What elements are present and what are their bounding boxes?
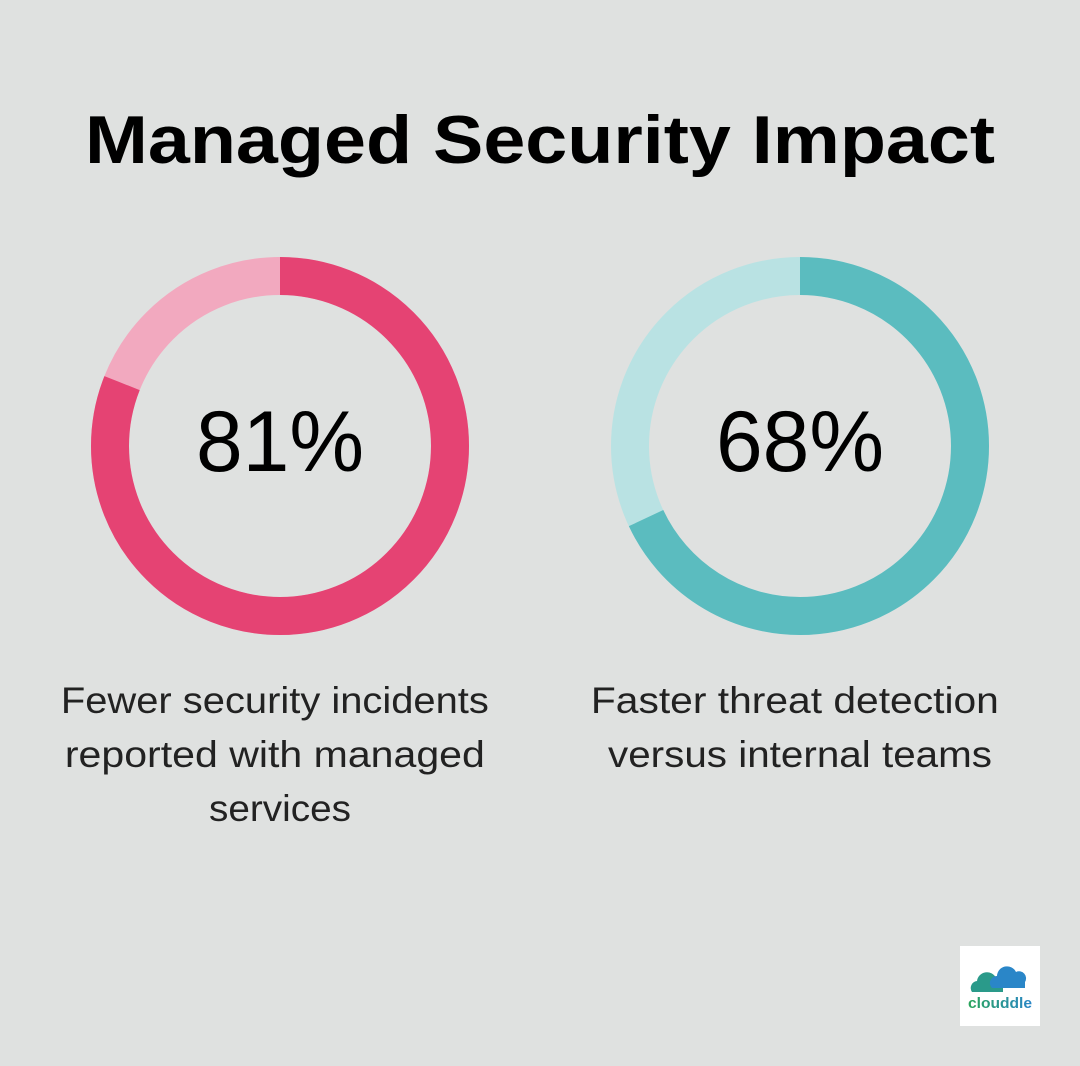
donut chart: 81% <box>110 276 450 616</box>
logo <box>960 946 1040 1026</box>
title: Managed Security Impact <box>85 102 995 178</box>
caption: right: Faster threat detection <box>591 680 999 721</box>
caption: right: versus internal teams <box>608 734 992 775</box>
caption: left: reported with managed <box>65 734 485 775</box>
caption: left: Fewer security incidents <box>61 680 489 721</box>
value: 81%: 81% <box>196 394 364 490</box>
logo: clouddle <box>968 995 1032 1012</box>
donut chart: 68% <box>630 276 970 616</box>
value: 68%: 68% <box>716 394 884 490</box>
caption: left: services <box>209 788 351 829</box>
